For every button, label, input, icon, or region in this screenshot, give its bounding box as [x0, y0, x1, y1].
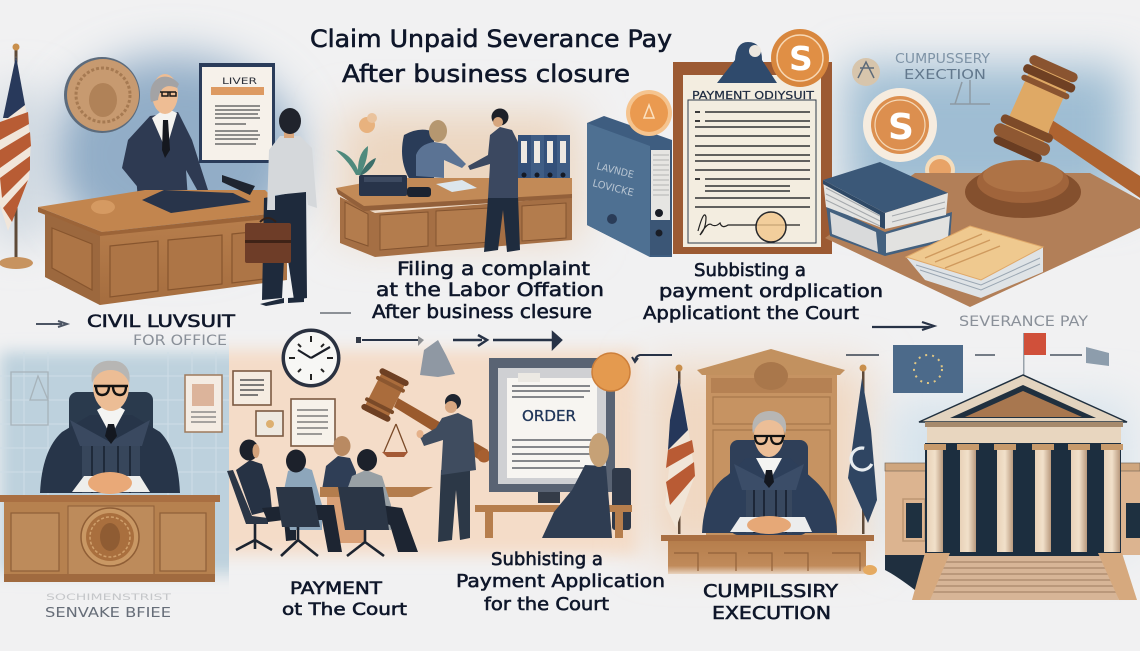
label: submitting payment application: Subhisting a — [491, 549, 603, 570]
icon: blue binder — [587, 116, 672, 257]
label: filing a complaint: at the Labor Offation — [376, 279, 604, 301]
label: compulsory execution: CUMPILSSIRY — [703, 581, 839, 602]
figure: seated clerk at desk — [475, 433, 632, 538]
title: After business closure — [342, 60, 630, 88]
desk: labor office desk — [336, 175, 572, 257]
label: filing a complaint: Filing a complaint — [397, 258, 590, 280]
icon: blue star flag — [893, 345, 963, 393]
label: submitting payment application: Payment Application — [456, 571, 665, 592]
label: submitting payment application — [456, 549, 665, 615]
arrow: back to order — [632, 355, 672, 362]
panel: compulsory execution judge — [661, 349, 879, 624]
icon: small coin — [852, 58, 880, 86]
arrow: to severance pay — [872, 322, 934, 330]
label: payment of the court: PAYMENT — [290, 579, 383, 599]
arrow: to civil lawsuit — [36, 321, 67, 327]
wall frames — [11, 372, 222, 432]
title: Claim Unpaid Severance Pay — [310, 25, 672, 53]
icon: dollar coin on clipboard: S — [789, 39, 813, 78]
label: submitting payment application — [643, 260, 883, 324]
faded label: service office: SENVAKE BFIEE — [45, 606, 171, 621]
table — [825, 173, 1140, 307]
title — [310, 25, 672, 88]
wall frames — [233, 371, 335, 446]
icon: dollar coin on clipboard — [771, 29, 829, 87]
arrows: process flow — [356, 333, 561, 348]
panel: civil lawsuit office — [0, 44, 317, 332]
icon: monitor with order: ORDER — [522, 407, 576, 425]
faded label: severance pay: SEVERANCE PAY — [959, 314, 1089, 330]
figure: official behind desk — [122, 74, 208, 200]
icon: gavel — [965, 52, 1140, 218]
icon: blue binder: LAVNDE — [595, 161, 635, 181]
connector line — [320, 312, 351, 314]
panel: labor office complaint — [320, 108, 604, 323]
label: payment of the court — [282, 579, 407, 620]
clipboard: payment order document: PAYMENT ODIYSUIT — [692, 89, 814, 102]
icon: wall seal — [64, 57, 140, 133]
figure: person filing complaint — [468, 108, 520, 252]
icon: scales — [382, 424, 408, 457]
label: compulsory execution: EXECUTION — [712, 603, 831, 624]
icon: small coin on table — [925, 155, 955, 185]
icon: american flag — [0, 44, 33, 269]
faded label: service office — [45, 593, 172, 621]
poster: liver notice: LIVER — [222, 77, 257, 87]
faded label: compulsory execution — [895, 52, 990, 104]
figure: seated clerk — [402, 120, 466, 180]
icon: blue binder: LOVICKE — [591, 178, 635, 199]
figure: judge — [702, 411, 837, 535]
icon: american flag — [665, 364, 695, 534]
desk: front office desk — [38, 175, 287, 305]
panel: payment order suit — [587, 29, 1140, 330]
label: submitting payment application: Subbisting a — [694, 260, 806, 281]
icon: court gavel — [360, 367, 490, 462]
icon: pennant flags — [975, 333, 1109, 375]
icon: coin on monitor — [592, 353, 630, 391]
icon: coin on binder — [626, 90, 672, 136]
faded label: service office: SOCHIMENSTRIST — [46, 593, 172, 603]
icon: plant and flower — [336, 113, 377, 175]
icon: wall clock — [282, 328, 340, 388]
label: submitting payment application: for the Court — [484, 594, 609, 615]
label: filing a complaint — [372, 258, 604, 323]
label: submitting payment application: payment ordplication — [659, 281, 883, 302]
label: compulsory execution — [703, 581, 839, 624]
label: civil lawsuit: CIVIL LUVSUIT — [87, 312, 236, 332]
panel: court payment hearing — [227, 328, 672, 620]
figure: judge — [40, 361, 180, 494]
desk: judge bench with seal — [0, 495, 220, 582]
label: payment of the court: ot The Court — [282, 600, 407, 620]
icon: binders — [518, 135, 570, 187]
faded label: compulsory execution: CUMPUSSERY — [895, 52, 990, 67]
figure: standing speaker — [416, 394, 476, 542]
clipboard: payment order document — [673, 42, 832, 254]
panel: judge at office bench — [0, 333, 227, 621]
icon: navy flag — [847, 364, 877, 534]
building: courthouse portico — [919, 375, 1127, 558]
desk: judge bench — [661, 535, 877, 575]
building: courthouse wings — [885, 463, 1140, 590]
figure: client with briefcase — [245, 108, 317, 306]
icon: open book on table — [906, 226, 1043, 298]
icon: large dollar coin — [863, 88, 937, 162]
connector line — [846, 354, 879, 356]
label: submitting payment application: Applicationt the Court — [643, 303, 859, 324]
icon: large dollar coin: S — [888, 107, 914, 148]
faded label: for office: FOR OFFICE — [133, 333, 227, 349]
poster: liver notice — [199, 63, 275, 163]
icon: monitor with order — [489, 358, 615, 503]
panel: courthouse — [885, 333, 1140, 600]
faded label: compulsory execution: EXECTION — [904, 68, 986, 83]
icon: judge chair back wood panel — [697, 349, 845, 535]
label: filing a complaint: After business clesure — [372, 301, 592, 323]
figures: seated group at table — [227, 436, 433, 556]
building: courthouse steps — [912, 553, 1137, 600]
icon: stacked books — [823, 162, 952, 256]
icon: grey hat — [420, 340, 455, 377]
